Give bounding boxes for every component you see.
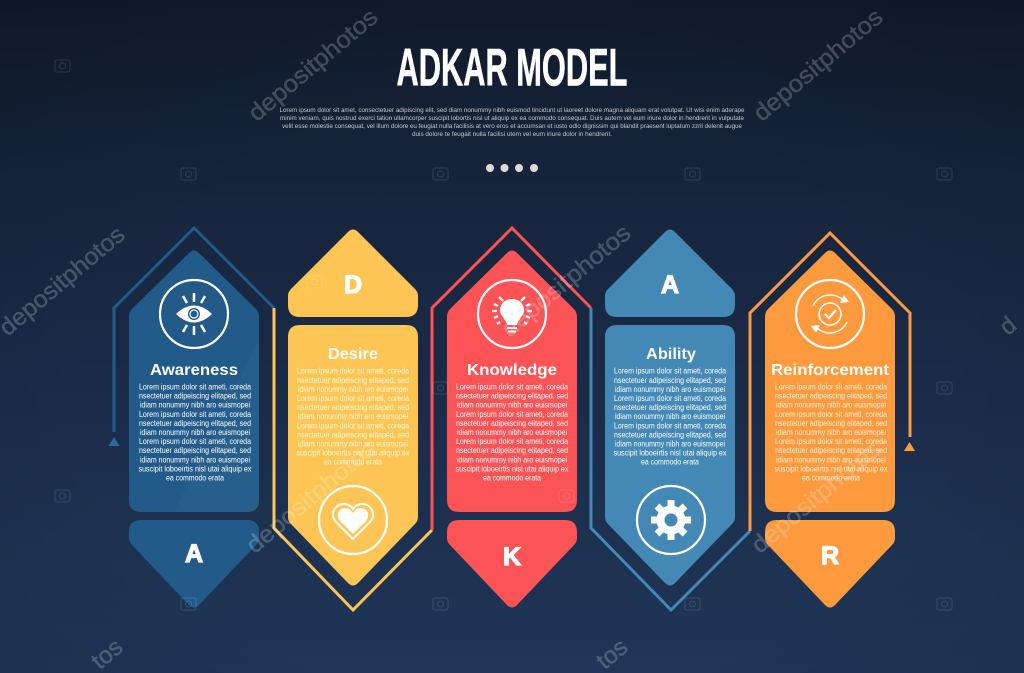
body text: suscipit loboeirtis nisl utai aliquip ex: [774, 464, 888, 473]
body text: nsectetuer adipeiscing elitaped, sed: [775, 419, 887, 428]
letter A: A: [661, 271, 679, 299]
panel: desire: [288, 230, 418, 586]
intro paragraph: Lorem ipsum dolor sit amet, consectetuer adipiscing elit, sed diam nonummy nibh euismod tincidunt ut laoreet dolore magna aliquam erat volutpat. Ut wisi enim aderape: [280, 107, 745, 114]
body text: Lorem ipsum dolor sit ameti, coreda: [614, 367, 726, 376]
body text: nsectetuer adipeiscing elitaped, sed: [297, 376, 409, 385]
body text: Lorem ipsum dolor sit ameti, coreda: [775, 382, 887, 392]
heading: Desire: [328, 346, 378, 363]
letter K: K: [503, 543, 521, 571]
ability body shape: [605, 325, 735, 586]
reinforcement body shape: [765, 250, 895, 512]
outline: ability: [591, 308, 750, 610]
watermarks: depositphotos: [243, 3, 383, 127]
body text: nsectetuer adipeiscing elitaped, sed: [139, 446, 251, 455]
body text: [138, 382, 252, 482]
body text: nsectetuer adipeiscing elitaped, sed: [456, 419, 568, 428]
body text: [614, 367, 726, 467]
icon: refresh check: [796, 280, 864, 348]
body text: Lorem ipsum dolor sit ameti, coreda: [456, 382, 568, 392]
letter block R: [765, 520, 895, 608]
body text: idiam nonummy nibh aro euismopei: [615, 385, 725, 394]
body text: [456, 382, 568, 482]
intro paragraph: velit esse molestie consequat, vel illum dolore eu feugiat nulla facilisis at vero eros et accumsan et iusto odio dignissim qui blandit praesent luptatum zzril delenit augue: [282, 123, 743, 130]
heading: Reinforcement: [771, 362, 890, 379]
panel: awareness: [129, 250, 259, 608]
body text: [774, 382, 888, 482]
body text: [296, 367, 410, 467]
intro paragraph: duis dolore te feugait nulla facilisi utem vel eum iriure dolor in hendrerit.: [412, 131, 612, 138]
panel: ability: [605, 230, 735, 586]
letter D: D: [344, 271, 362, 299]
watermarks: depositphotos: [241, 435, 381, 559]
body text: idiam nonummy nibh aro euismopei: [298, 412, 408, 421]
body text: idiam nonummy nibh aro euismopei: [457, 455, 567, 464]
outline: awareness: [108, 228, 274, 446]
intro paragraph: minim veniam, quis nostrud exerci tation ullamcorper suscipit lobortis nisl ut aliquip ex ea commodo consequat. Duis autem vel eum iriure dolor in hendrerit in vulputate: [280, 115, 745, 122]
outline: reinforcement: [750, 233, 915, 531]
body text: Lorem ipsum dolor sit ameti, coreda: [614, 394, 726, 403]
camera watermark icons: [55, 60, 952, 610]
body text: Lorem ipsum dolor sit ameti, coreda: [456, 410, 568, 419]
body text: idiam nonummy nibh aro euismopei: [140, 455, 250, 464]
body text: Lorem ipsum dolor sit ameti, coreda: [297, 367, 409, 376]
body text: idiam nonummy nibh aro euismopei: [298, 385, 408, 394]
intro paragraph: [280, 107, 745, 138]
body text: ea commodo erata: [483, 474, 541, 482]
body text: nsectetuer adipeiscing elitaped, sed: [775, 392, 887, 401]
icon: gear: [637, 486, 705, 554]
letter A: A: [185, 540, 203, 568]
body text: idiam nonummy nibh aro euismopei: [615, 412, 725, 421]
outline: desire: [274, 308, 432, 610]
body text: suscipit loboeirtis nisl utai aliquip ex: [614, 449, 726, 458]
desire body shape: [288, 325, 418, 586]
letter R: R: [821, 542, 839, 570]
body text: idiam nonummy nibh aro euismopei: [140, 401, 250, 410]
knowledge body shape: [447, 250, 577, 512]
body text: Lorem ipsum dolor sit ameti, coreda: [775, 410, 887, 419]
panel: reinforcement: [765, 250, 895, 608]
body text: idiam nonummy nibh aro euismopei: [457, 401, 567, 410]
body text: idiam nonummy nibh aro euismopei: [140, 428, 250, 437]
title: ADKAR MODEL: [396, 38, 628, 98]
body text: Lorem ipsum dolor sit ameti, coreda: [139, 437, 251, 446]
body text: nsectetuer adipeiscing elitaped, sed: [456, 446, 568, 455]
heading: Knowledge: [467, 362, 557, 379]
body text: suscipit loboeirtis nisl utai aliquip ex: [296, 449, 410, 458]
body text: Lorem ipsum dolor sit ameti, coreda: [456, 437, 568, 446]
body text: Lorem ipsum dolor sit ameti, coreda: [297, 421, 409, 430]
letter block A: [605, 230, 735, 317]
body text: nsectetuer adipeiscing elitaped, sed: [139, 392, 251, 401]
icon: eye: [160, 280, 228, 348]
body text: ea commodo erata: [802, 474, 860, 482]
letter block A: [129, 520, 259, 608]
letter block K: [447, 520, 577, 608]
heading: Ability: [646, 346, 696, 363]
pagination dots: [486, 164, 538, 172]
panel: knowledge: [447, 250, 577, 608]
body text: idiam nonummy nibh aro euismopei: [776, 428, 886, 437]
watermarks: d: [994, 312, 1022, 341]
body text: suscipit loboeirtis nisl utai aliquip ex: [456, 464, 568, 473]
body text: suscipit loboeirtis nisl utai aliquip ex: [138, 464, 252, 473]
body text: ea commodo erata: [641, 458, 699, 467]
watermarks: depositphotos: [748, 3, 888, 127]
heading: Awareness: [150, 362, 238, 379]
body text: nsectetuer adipeiscing elitaped, sed: [614, 403, 726, 412]
body text: nsectetuer adipeiscing elitaped, sed: [139, 419, 251, 428]
body text: nsectetuer adipeiscing elitaped, sed: [297, 403, 409, 412]
body text: nsectetuer adipeiscing elitaped, sed: [297, 430, 409, 439]
watermarks: depositphotos: [496, 219, 636, 343]
facet: [174, 340, 259, 512]
body text: nsectetuer adipeiscing elitaped, sed: [614, 430, 726, 439]
body text: idiam nonummy nibh aro euismopei: [776, 401, 886, 410]
outline: knowledge: [432, 228, 591, 530]
body text: Lorem ipsum dolor sit ameti, coreda: [139, 410, 251, 419]
body text: idiam nonummy nibh aro euismopei: [776, 455, 886, 464]
body text: idiam nonummy nibh aro euismopei: [298, 440, 408, 448]
body text: Lorem ipsum dolor sit ameti, coreda: [775, 437, 887, 446]
body text: Lorem ipsum dolor sit ameti, coreda: [139, 382, 251, 392]
body text: nsectetuer adipeiscing elitaped, sed: [775, 446, 887, 455]
body text: idiam nonummy nibh aro euismopei: [457, 428, 567, 437]
watermarks: depositphotos: [746, 435, 886, 559]
body text: ea commodo erata: [324, 458, 382, 467]
body text: ea commodo erata: [166, 474, 224, 482]
body text: idiam nonummy nibh aro euismopei: [615, 440, 725, 448]
body text: nsectetuer adipeiscing elitaped, sed: [614, 376, 726, 385]
awareness body shape: [129, 250, 259, 512]
body text: nsectetuer adipeiscing elitaped, sed: [456, 392, 568, 401]
body text: Lorem ipsum dolor sit ameti, coreda: [614, 421, 726, 430]
letter block D: [288, 230, 418, 317]
body text: Lorem ipsum dolor sit ameti, coreda: [297, 394, 409, 403]
icon: heart: [319, 486, 387, 554]
icon: light bulb: [478, 280, 546, 348]
